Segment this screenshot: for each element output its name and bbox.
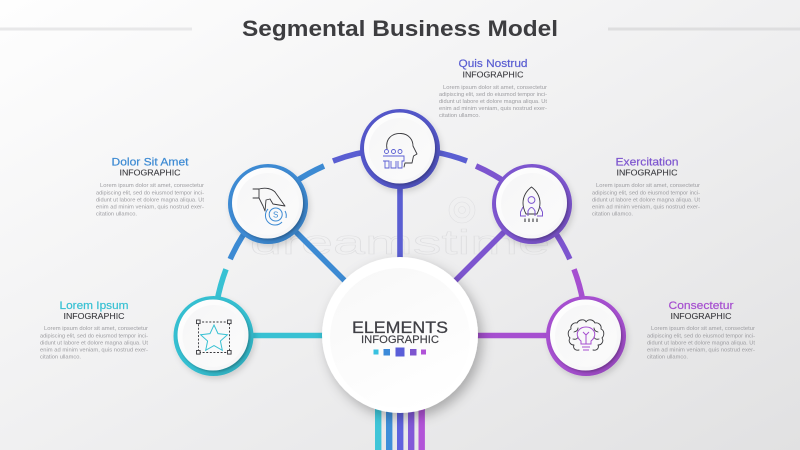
- text block: Quis Nostrud: enim ad minim veniam, quis nostrud exer-: [439, 106, 547, 112]
- connector: Dolor Sit Amet: [230, 166, 345, 281]
- text block: Exercitation: [592, 156, 700, 218]
- central label: ELEMENTS: [352, 318, 448, 337]
- text block: Quis Nostrud: adipiscing elit, sed do eiusmod tempor inci-: [439, 92, 547, 98]
- node: Dolor Sit Amet: [228, 164, 308, 244]
- text block: Quis Nostrud: Quis Nostrud: [458, 58, 528, 70]
- text block: Exercitation: INFOGRAPHIC: [616, 168, 678, 178]
- watermark: [250, 197, 550, 262]
- text block: Exercitation: citation ullamco.: [592, 212, 633, 218]
- text block: Dolor Sit Amet: [96, 156, 204, 218]
- icon: hand and coin: S: [273, 210, 278, 220]
- text block: Dolor Sit Amet: citation ullamco.: [96, 212, 137, 218]
- header rule left: [0, 28, 192, 30]
- text block: Dolor Sit Amet: didunt ut labore et dolore magna aliqua. Ut: [96, 198, 204, 204]
- node: Consectetur: [546, 296, 626, 376]
- icon: brain with light bulb: [568, 320, 604, 350]
- connector: Quis Nostrud: [333, 149, 467, 265]
- text block: Exercitation: Lorem ipsum dolor sit amet, consectetur: [596, 183, 700, 189]
- text block: Consectetur: INFOGRAPHIC: [670, 311, 732, 321]
- connector: Consectetur: [470, 269, 586, 336]
- text block: Exercitation: enim ad minim veniam, quis nostrud exer-: [592, 204, 700, 210]
- text block: Lorem Ipsum: didunt ut labore et dolore magna aliqua. Ut: [40, 340, 148, 346]
- icon: star in selection box: [196, 320, 231, 354]
- header rule right: [608, 28, 800, 30]
- text block: Dolor Sit Amet: INFOGRAPHIC: [120, 168, 180, 178]
- text block: Consectetur: [647, 300, 755, 360]
- text block: Lorem Ipsum: [40, 300, 148, 360]
- icon: head with team: [383, 133, 417, 168]
- central circle: [322, 257, 478, 413]
- text block: Quis Nostrud: didunt ut labore et dolore magna aliqua. Ut: [439, 99, 547, 105]
- text block: Consectetur: adipiscing elit, sed do eiusmod tempor inci-: [647, 334, 755, 340]
- text block: Lorem Ipsum: Lorem ipsum dolor sit amet, consectetur: [44, 326, 148, 332]
- central label: INFOGRAPHIC: [361, 334, 439, 346]
- text block: Exercitation: Exercitation: [616, 156, 678, 168]
- bottom stripes: [375, 405, 425, 450]
- text block: Consectetur: citation ullamco.: [647, 354, 688, 360]
- text block: Exercitation: didunt ut labore et dolore magna aliqua. Ut: [592, 198, 700, 204]
- text block: Dolor Sit Amet: Dolor Sit Amet: [112, 156, 188, 168]
- text block: Lorem Ipsum: INFOGRAPHIC: [64, 311, 124, 321]
- text block: Lorem Ipsum: enim ad minim veniam, quis nostrud exer-: [40, 348, 148, 354]
- text block: Quis Nostrud: INFOGRAPHIC: [462, 70, 524, 80]
- central label: [352, 318, 448, 346]
- text block: Quis Nostrud: Lorem ipsum dolor sit amet, consectetur: [443, 85, 547, 91]
- icon: rocket: [520, 187, 542, 222]
- text block: Lorem Ipsum: adipiscing elit, sed do eiusmod tempor inci-: [40, 334, 148, 340]
- text block: Consectetur: enim ad minim veniam, quis nostrud exer-: [647, 348, 755, 354]
- connector: Lorem Ipsum: [214, 269, 330, 336]
- text block: Dolor Sit Amet: enim ad minim veniam, quis nostrud exer-: [96, 204, 204, 210]
- watermark: dreamstime: [250, 224, 550, 262]
- text block: Lorem Ipsum: citation ullamco.: [40, 354, 81, 360]
- text block: Dolor Sit Amet: Lorem ipsum dolor sit amet, consectetur: [100, 183, 204, 189]
- text block: Quis Nostrud: citation ullamco.: [439, 113, 480, 119]
- text block: Consectetur: didunt ut labore et dolore magna aliqua. Ut: [647, 340, 755, 346]
- node: Quis Nostrud: [360, 109, 440, 189]
- text block: Exercitation: adipiscing elit, sed do eiusmod tempor inci-: [592, 190, 700, 196]
- node: Exercitation: [492, 164, 572, 244]
- text block: Lorem Ipsum: Lorem Ipsum: [60, 300, 128, 312]
- title: Segmental Business Model: [242, 16, 558, 41]
- text block: Consectetur: Consectetur: [668, 300, 734, 312]
- node: Lorem Ipsum: [174, 296, 254, 376]
- text block: Consectetur: Lorem ipsum dolor sit amet, consectetur: [651, 326, 755, 332]
- connector: Exercitation: [455, 166, 570, 281]
- central colour squares: [374, 348, 426, 356]
- text block: Dolor Sit Amet: adipiscing elit, sed do eiusmod tempor inci-: [96, 190, 204, 196]
- text block: Quis Nostrud: [439, 58, 547, 119]
- connectors: [214, 149, 586, 336]
